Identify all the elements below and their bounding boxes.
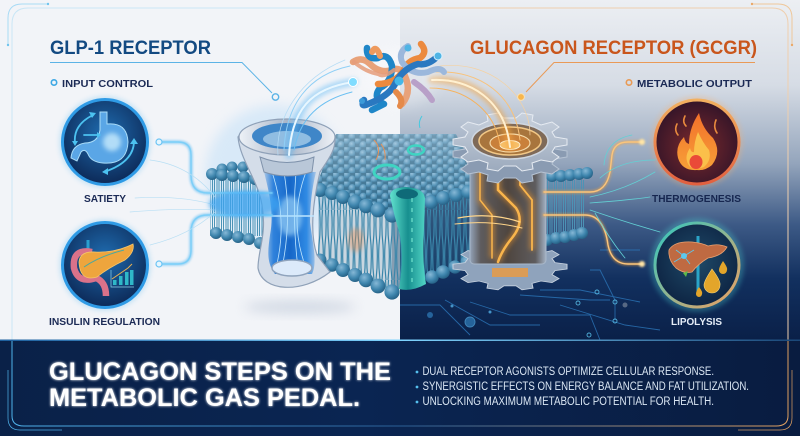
footer headline (49, 358, 391, 412)
lower gear (453, 243, 567, 290)
label: insulin regulation: INSULIN REGULATION (49, 317, 160, 328)
icon: small rear teal pores (374, 116, 424, 179)
icon: teal membrane channel (390, 187, 426, 290)
panel: footer (0, 340, 800, 436)
footer bullet list: UNLOCKING MAXIMUM METABOLIC POTENTIAL FOR HEALTH. (422, 396, 714, 408)
ember glow in membrane (348, 228, 364, 252)
footer headline: GLUCAGON STEPS ON THE (49, 358, 391, 386)
icon: GLP-1 funnel receptor (238, 119, 335, 287)
orange circuit glow (480, 165, 532, 262)
title: GLP-1 receptor: GLP-1 RECEPTOR (50, 38, 211, 59)
subheading: input control: INPUT CONTROL (62, 79, 154, 90)
callout line: glucagon to gear (518, 62, 755, 100)
panel: circuit traces lower right (400, 250, 660, 340)
arrow: orange signal arc (430, 65, 530, 147)
footer bullet list: SYNERGISTIC EFFECTS ON ENERGY BALANCE AND FAT UTILIZATION. (422, 381, 749, 393)
funnel outer silver shell (238, 123, 335, 287)
label: satiety: SATIETY (84, 194, 126, 205)
label: thermogenesis: THERMOGENESIS (652, 194, 741, 205)
icon: peptide tangle (348, 44, 444, 110)
funnel rim (239, 119, 335, 155)
membrane top surface (318, 134, 470, 212)
funnel collar (260, 157, 314, 176)
shadow under funnel (244, 301, 356, 313)
cylinder body (470, 160, 546, 264)
footer bullet list (416, 366, 749, 408)
funnel bottom ring (272, 260, 312, 276)
callout line: GLP-1 to funnel (50, 62, 279, 100)
label: lipolysis: LIPOLYSIS (671, 317, 722, 328)
footer headline: METABOLIC GAS PEDAL. (49, 384, 360, 412)
background: light left half (0, 0, 400, 340)
gear side thickness (453, 125, 567, 183)
background: dark gradient right half (400, 0, 800, 340)
funnel light strands (266, 172, 314, 268)
membrane front spheres top row (313, 181, 486, 223)
panel: central lipid bilayer (316, 134, 470, 300)
panel: lipid membrane left strip (206, 162, 266, 249)
membrane tails right face (392, 190, 482, 292)
subheading: metabolic output: METABOLIC OUTPUT (637, 79, 753, 90)
gear rim (472, 123, 548, 159)
panel: lipid membrane right strip (541, 167, 593, 246)
funnel blue core (264, 172, 316, 274)
membrane front spheres bottom row (314, 251, 484, 300)
arrow: blue signal arc (278, 60, 354, 155)
panel: left glow behind funnel (205, 105, 345, 245)
gear top teeth (453, 113, 567, 171)
arrow: orange and teal pathways from gear (544, 135, 660, 267)
footer frame line (12, 341, 788, 426)
arrow: blue pathways to funnel (130, 139, 281, 267)
icon: thermogenesis flame (651, 96, 743, 188)
icon: glucagon gear receptor (453, 113, 567, 290)
icon: insulin regulation pancreas (59, 219, 151, 311)
frame: top corner lines (7, 3, 793, 340)
orange internal circuits (455, 165, 532, 262)
membrane surface back fade (316, 134, 484, 214)
icon: satiety stomach (59, 96, 151, 188)
icon: lipolysis liver (650, 218, 744, 312)
footer bullet list: DUAL RECEPTOR AGONISTS OPTIMIZE CELLULAR RESPONSE. (422, 366, 714, 378)
membrane tails left face (318, 192, 392, 292)
title: glucagon receptor: GLUCAGON RECEPTOR (GCGR) (470, 38, 757, 59)
